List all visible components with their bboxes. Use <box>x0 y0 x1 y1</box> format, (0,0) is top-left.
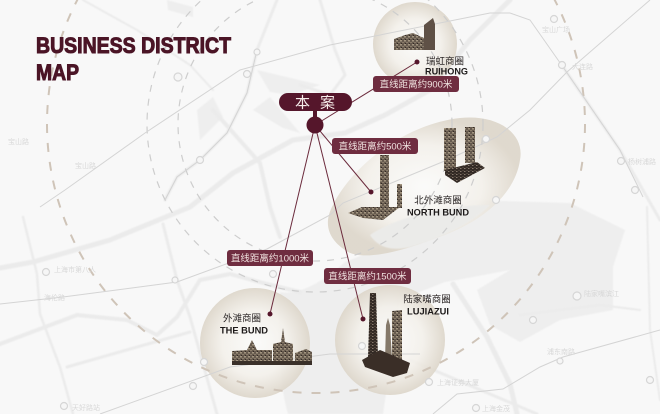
callout: The Bund: 外滩商圈 <box>223 312 261 324</box>
map station markers and place names: 上海金茂 <box>482 404 510 413</box>
icon: The Bund buildings <box>232 328 312 365</box>
title: BUSINESS DISTRICT <box>36 33 231 58</box>
icon: Ruihong buildings <box>394 18 435 50</box>
callout: North Bund: 北外滩商圈 <box>414 194 462 206</box>
callout: The Bund <box>220 250 313 336</box>
map station markers and place names: 上海证券大厦 <box>437 378 479 387</box>
river tint inside North Bund blob <box>370 205 490 249</box>
callout: The Bund: THE BUND <box>220 326 268 336</box>
title: MAP <box>36 60 79 85</box>
callout: Lujiazui: LUJIAZUI <box>407 306 449 318</box>
callout: North Bund: 直线距离约500米 <box>339 140 412 152</box>
map station markers and place names: 大连路 <box>572 62 593 71</box>
leader lines from project marker <box>270 62 417 319</box>
callout: Ruihong: RUIHONG <box>425 66 468 78</box>
panel: Ruihong district blob <box>373 2 457 86</box>
map station markers and place names: 宝山广场 <box>542 25 570 34</box>
callout: Lujiazui: 陆家嘴商圈 <box>403 294 451 306</box>
callout: North Bund <box>332 138 469 218</box>
map station markers and place names: 天好路站 <box>72 403 100 412</box>
callout: Ruihong <box>373 56 468 92</box>
callout: Lujiazui <box>324 268 451 322</box>
distance rings <box>47 0 585 393</box>
map station markers and place names: 陆家嘴滨江 <box>584 289 619 298</box>
callout: North Bund: NORTH BUND <box>407 208 469 218</box>
callout: Ruihong: 瑞虹商圈 <box>426 56 464 68</box>
icon: Lujiazui towers <box>362 293 410 377</box>
callout: Lujiazui: 直线距离约1500米 <box>328 270 407 282</box>
panel: The Bund district blob <box>200 288 310 398</box>
marker: project pin <box>279 93 352 134</box>
icon: North Bund towers <box>348 127 485 220</box>
callout: The Bund: 直线距离约1000米 <box>231 252 310 264</box>
title <box>36 33 231 85</box>
map station markers and place names: 浦东南路 <box>547 347 575 356</box>
panel: North Bund district blob <box>328 118 521 255</box>
map station markers and place names: 宝山路 <box>8 137 29 146</box>
panel: Lujiazui district blob <box>335 285 445 395</box>
callout: Ruihong: 直线距离约900米 <box>380 78 453 90</box>
map station markers and place names: 海伦路 <box>44 293 65 302</box>
map station markers and place names: 杨树浦路 <box>628 157 656 166</box>
map station markers and place names: 上海市第八人 <box>54 265 96 274</box>
marker: project pin: 本案 <box>295 94 335 112</box>
map station markers and place names: 宝山路 <box>75 161 96 170</box>
river and grey map blocks <box>167 0 625 414</box>
